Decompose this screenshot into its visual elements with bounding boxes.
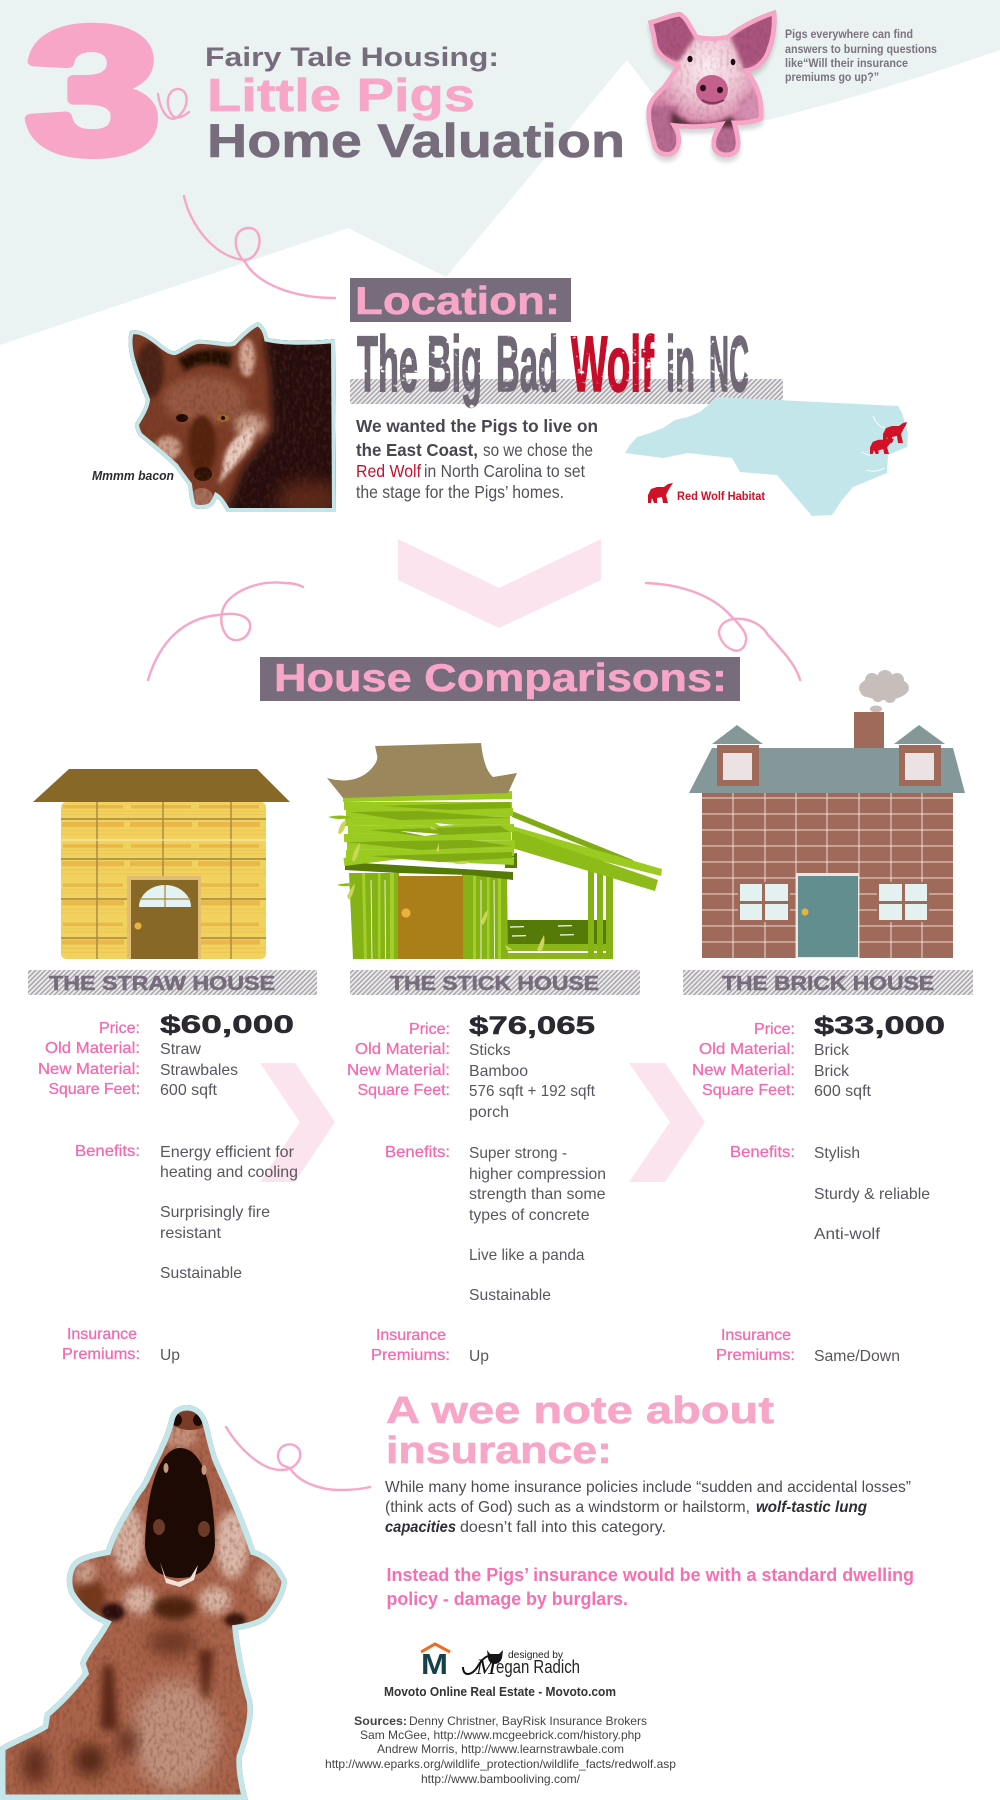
logo: designed by Megan Radich: designed by [508, 1650, 563, 1661]
title line 1: Fairy Tale Housing: [205, 42, 499, 72]
heading: wee note about insurance [386, 1390, 774, 1472]
details: straw house: $60,000 [160, 1011, 294, 1039]
legend: red wolf habitat: Red Wolf Habitat [677, 489, 765, 503]
details: stick house: Super strong - [469, 1145, 567, 1162]
details: stick house: Square Feet: [358, 1082, 450, 1099]
brick house windows [738, 882, 929, 922]
brick house door [796, 873, 859, 958]
pink conclusion text: Instead the Pigs’ insurance would be with a standard dwelling [386, 1565, 914, 1585]
straw house roof [33, 769, 290, 802]
details: brick house: Old Material: [699, 1041, 795, 1058]
location paragraph: so we chose the [483, 440, 593, 460]
house: brick [689, 670, 965, 958]
details: straw house: Up [160, 1347, 180, 1364]
details: brick house: Anti-wolf [814, 1226, 881, 1243]
details: brick house: Brick [814, 1042, 850, 1059]
headline: The Big Bad Wolf in NC: Bad [496, 319, 558, 408]
stick house leaves [328, 816, 545, 952]
column title: stick house: THE STICK HOUSE [390, 973, 599, 995]
arrow: chevron between stick and brick [629, 1063, 705, 1182]
column title: brick house: THE BRICK HOUSE [722, 973, 934, 995]
pink conclusion text: policy - damage by burglars. [386, 1589, 628, 1609]
details: stick house: Price: [409, 1021, 450, 1038]
location paragraph: in North Carolina to set [424, 461, 585, 481]
curl beside the 3 [158, 89, 189, 119]
location paragraph: the stage for the Pigs’ homes. [356, 482, 564, 502]
details: straw house: 600 sqft [160, 1082, 218, 1099]
details: straw house: Price: [99, 1020, 140, 1037]
details: stick house: Bamboo [469, 1063, 528, 1080]
details: brick house: Benefits: [730, 1144, 795, 1161]
pig caption: premiums go up?” [785, 70, 879, 84]
icon: pig photo [645, 10, 778, 164]
details: brick house [692, 1012, 945, 1365]
insurance paragraph [385, 1479, 911, 1536]
details: stick house: Premiums: [371, 1347, 450, 1364]
details: brick house: New Material: [692, 1062, 795, 1079]
curl connector to location [184, 196, 335, 298]
house: straw [33, 769, 290, 959]
pig caption: answers to burning questions [785, 42, 937, 56]
wolf nose [172, 1411, 204, 1430]
title block [26, 0, 625, 190]
details: straw house: resistant [160, 1225, 222, 1242]
brick chimney [854, 712, 884, 749]
logo: designed by Megan Radich [463, 1650, 580, 1679]
headline: The Big Bad Wolf in NC: in [666, 319, 695, 408]
column title: brick house [683, 970, 973, 995]
heading: wee note about insurance: insurance: [386, 1430, 612, 1472]
stick house porch [507, 811, 662, 959]
legend: red wolf habitat [648, 483, 765, 503]
icon: wolves on map [870, 422, 907, 454]
title line 3: Home Valuation [207, 114, 625, 167]
logo: designed by Megan Radich: egan Radich [496, 1657, 580, 1677]
details: stick house [347, 1012, 606, 1365]
details: brick house: Insurance [721, 1327, 791, 1344]
footer: sources [325, 1714, 676, 1786]
details: straw house: Sustainable [160, 1265, 242, 1282]
heading: wee note about insurance: A wee note about [386, 1390, 774, 1432]
location paragraph: We wanted the Pigs to live on [356, 416, 598, 436]
details: straw house: Surprisingly fire [160, 1204, 270, 1221]
details: brick house: $33,000 [814, 1012, 945, 1040]
pink conclusion text [386, 1565, 914, 1609]
details: stick house: Old Material: [355, 1041, 450, 1058]
column title: straw house [28, 970, 317, 995]
footer: sources: Andrew Morris, http://www.learnstrawbale.com [377, 1742, 624, 1756]
pig caption [785, 27, 937, 84]
stick house door [398, 876, 463, 959]
caption: Mmmm bacon: Mmmm bacon [92, 468, 174, 483]
insurance paragraph: wolf-tastic lung [756, 1499, 867, 1516]
icon: red wolf photo [128, 322, 336, 512]
wolf open mouth [145, 1448, 215, 1587]
details: stick house: 576 sqft + 192 sqft [469, 1083, 596, 1100]
details: stick house: porch [469, 1104, 509, 1121]
details: brick house: Sturdy & reliable [814, 1186, 930, 1203]
details: stick house: $76,065 [469, 1012, 595, 1040]
details: brick house: 600 sqft [814, 1083, 872, 1100]
brick house smoke [859, 670, 909, 712]
location paragraph [356, 416, 598, 502]
map: North Carolina with red wolf habitat [625, 397, 908, 516]
arrow: big down chevron [398, 539, 601, 628]
pig caption: Pigs everywhere can find [785, 27, 913, 41]
arrow: chevron between straw and stick [260, 1063, 335, 1182]
section heading: House Comparisons: House Comparisons: [274, 657, 727, 700]
details: stick house: Benefits: [385, 1144, 450, 1161]
insurance paragraph: (think acts of God) such as a windstorm or hailstorm, [385, 1499, 750, 1516]
details: stick house: Insurance [376, 1327, 446, 1344]
details: straw house: Strawbales [160, 1062, 238, 1079]
background: pale mint geometric shape [0, 0, 1000, 345]
brick house dormers [712, 725, 945, 786]
details: brick house: Same/Down [814, 1348, 900, 1365]
details: stick house: Live like a panda [469, 1247, 585, 1264]
column title: straw house: THE STRAW HOUSE [49, 973, 275, 995]
stick house woven wall [343, 795, 517, 880]
title line 2: Little Pigs [207, 69, 475, 121]
headline: The Big Bad Wolf in NC [357, 319, 749, 408]
location paragraph: Red Wolf [356, 461, 421, 481]
location label: Location: [355, 280, 560, 323]
details: brick house: Price: [754, 1021, 795, 1038]
icon: howling wolf photo [0, 1400, 290, 1800]
straw house door [127, 876, 201, 959]
details: straw house: Old Material: [45, 1040, 140, 1057]
insurance paragraph: capacities [385, 1519, 456, 1536]
location paragraph: the East Coast, [356, 440, 478, 460]
details: brick house: Stylish [814, 1145, 860, 1162]
brick wall [702, 793, 953, 958]
details: straw house: Benefits: [75, 1143, 140, 1160]
details: straw house: Square Feet: [48, 1081, 140, 1098]
headline: The Big Bad Wolf in NC: Wolf [571, 319, 654, 408]
details: stick house: higher compression [469, 1166, 606, 1183]
details: straw house: Energy efficient for [160, 1144, 295, 1161]
footer: sources: http://www.bambooliving.com/ [421, 1772, 581, 1786]
footer: sources: http://www.eparks.org/wildlife_protection/wildlife_facts/redwolf.asp [325, 1757, 676, 1771]
details: straw house: heating and cooling [160, 1164, 298, 1181]
brick house roof [689, 748, 965, 793]
curl left of comparisons [148, 582, 303, 680]
footer: sources: Sources: [354, 1714, 407, 1728]
headline: The Big Bad Wolf in NC: The [357, 319, 418, 408]
footer: sources: Denny Christner, BayRisk Insurance Brokers [409, 1714, 647, 1728]
headline: The Big Bad Wolf in NC: Big [427, 319, 482, 408]
details: stick house: strength than some [469, 1186, 606, 1203]
footer: Movoto credit: Movoto Online Real Estate - Movoto.com [384, 1685, 616, 1699]
details: straw house: Straw [160, 1041, 201, 1058]
insurance paragraph: doesn’t fall into this category. [460, 1519, 666, 1536]
details: brick house: Premiums: [716, 1347, 795, 1364]
text: NC [709, 319, 749, 408]
column title: stick house [350, 970, 640, 995]
footer: sources: Sam McGee, http://www.mcgeebrick.com/history.php [360, 1728, 641, 1742]
hatch band under headline [350, 379, 783, 404]
details: stick house: Sticks [469, 1042, 510, 1059]
details: brick house: Brick [814, 1063, 850, 1080]
curl near howling wolf [226, 1427, 370, 1490]
stick house roof [327, 743, 517, 798]
details: straw house [38, 1011, 298, 1364]
stick house lower walls [349, 873, 399, 959]
details: straw house: Insurance [67, 1326, 137, 1343]
details: stick house: types of concrete [469, 1207, 590, 1224]
pig caption: like“Will their insurance [785, 56, 908, 70]
curl right of comparisons [646, 583, 800, 680]
details: straw house: New Material: [38, 1061, 140, 1078]
details: stick house: Up [469, 1348, 489, 1365]
black cat icon [487, 1650, 503, 1664]
logo: designed by Megan Radich: M [475, 1654, 498, 1679]
logo: Movoto: M [421, 1649, 448, 1681]
details: brick house: Square Feet: [702, 1082, 795, 1099]
pig snout and eyes [687, 56, 735, 105]
house: stick [327, 743, 662, 959]
details: straw house: Premiums: [62, 1346, 140, 1363]
insurance paragraph: While many home insurance policies include “sudden and accidental losses” [385, 1479, 911, 1496]
details: stick house: New Material: [347, 1062, 450, 1079]
details: stick house: Sustainable [469, 1287, 551, 1304]
